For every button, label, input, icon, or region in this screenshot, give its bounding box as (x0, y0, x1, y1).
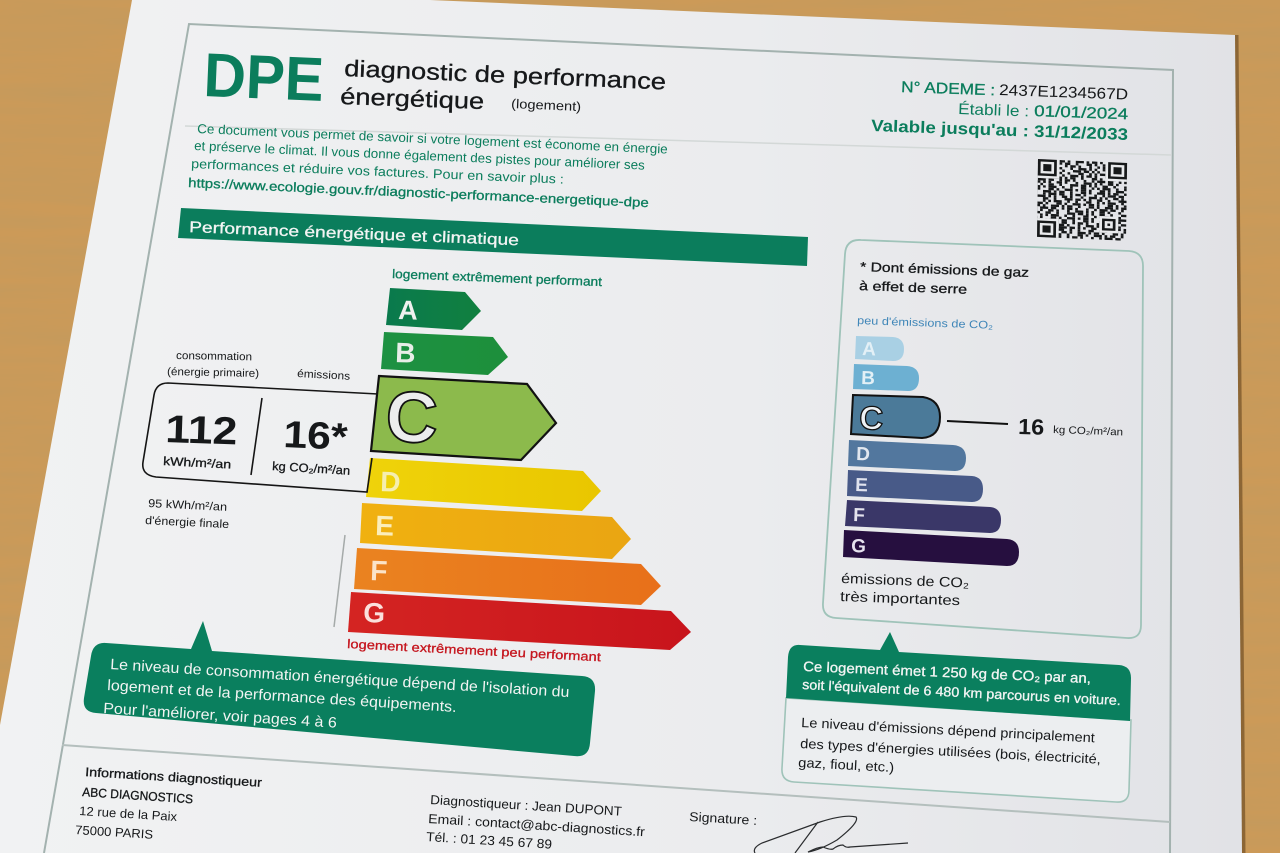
final energy note: 95 kWh/m²/an (148, 498, 227, 514)
bar D (848, 440, 966, 471)
callout: energy consumption: logement et de la performance des équipements. (107, 677, 457, 716)
bar B (853, 364, 919, 391)
unit: kWh: kWh/m²/an (163, 454, 231, 472)
callout: energy consumption (84, 621, 595, 756)
header: DPE logo: DPE (202, 41, 325, 115)
final energy note (145, 498, 229, 531)
footer: diagnostician details: Informations diagnostiqueur (85, 765, 262, 790)
bar C (current class) (851, 395, 940, 438)
icon: QR code (1037, 159, 1128, 241)
intro paragraph: et préserve le climat. Il vous donne également des pistes pour améliorer ses (194, 138, 646, 173)
callout: energy consumption: Le niveau de consommation énergétique dépend de l'isolation du (110, 656, 570, 701)
footer: diagnostician details: 75000 PARIS (75, 823, 154, 842)
bar G: G (851, 536, 866, 558)
value: 112: 112 (165, 408, 238, 454)
arrow G: G (363, 597, 386, 629)
consumption labels (167, 350, 351, 383)
header: title (340, 55, 667, 114)
arrow C (current class) (371, 376, 556, 460)
header: reference block: 2437E1234567D (999, 82, 1128, 103)
arrow E: E (375, 510, 395, 542)
bar A (855, 336, 904, 361)
arrow A: A (398, 295, 418, 326)
consumption labels: (énergie primaire) (167, 366, 259, 380)
value: 16 kg CO2 (1018, 414, 1123, 440)
final energy note: d'énergie finale (145, 515, 229, 531)
arrow F: F (370, 555, 388, 587)
arrow E (360, 503, 631, 559)
header: reference block: Établi le : (958, 101, 1029, 120)
footer: contact details (426, 792, 646, 852)
bar F (845, 500, 1001, 533)
arrow G (348, 592, 691, 650)
header: title: énergétique (340, 83, 485, 114)
callout: CO2 emissions: Ce logement émet 1 250 kg de CO₂ par an, (803, 658, 1091, 686)
header: reference block: Valable jusqu'au : 31/12/2033 (871, 117, 1128, 144)
arrow F (354, 548, 661, 605)
scale label: bottom: émissions de CO₂ (841, 570, 969, 590)
bar F: F (853, 505, 865, 526)
header: reference block: N° ADEME : (901, 79, 995, 99)
scale label: top: peu d'émissions de CO₂ (857, 315, 993, 332)
footer: signature: Signature : (689, 809, 758, 828)
intro paragraph: performances et réduire vos factures. Pour en savoir plus : (191, 156, 564, 187)
arrow B: B (395, 337, 416, 369)
footer: contact details: Email : contact@abc-diagnostics.fr (428, 811, 646, 839)
intro paragraph (188, 121, 668, 210)
arrow C (current class): C (384, 377, 439, 459)
footer: diagnostician details: ABC DIAGNOSTICS (82, 785, 193, 806)
bar A: A (862, 339, 877, 360)
bar C (current class): C (859, 399, 884, 437)
footer: signature (689, 809, 908, 853)
callout: CO2 emissions: Le niveau d'émissions dépend principalement (801, 715, 1095, 745)
CO2 scale bars A to G (843, 336, 1019, 566)
consumption labels: consommation (176, 350, 252, 363)
panel: greenhouse gas emissions: très importantes (840, 588, 960, 608)
footer: contact details: Tél. : 01 23 45 67 89 (426, 829, 552, 852)
callout: CO2 emissions: gaz, fioul, etc.) (798, 755, 894, 775)
arrow A (386, 288, 481, 330)
arrow D: D (380, 466, 401, 498)
header: reference block (871, 79, 1129, 144)
bar E (847, 470, 983, 502)
intro paragraph: Ce document vous permet de savoir si votre logement est économe en énergie (197, 121, 668, 157)
callout: CO2 emissions (782, 632, 1131, 802)
footer: diagnostician details (75, 765, 262, 842)
energy scale arrows A to G (348, 288, 691, 650)
panel heading: * Dont émissions de gaz (860, 259, 1029, 280)
footer: contact details: Diagnostiqueur : Jean DUPONT (430, 792, 622, 819)
header: title: (logement) (511, 96, 581, 114)
bar E: E (855, 475, 868, 496)
arrow D (366, 458, 601, 511)
divider beside lower scale (334, 535, 345, 627)
value leader line (947, 421, 1008, 424)
consumption labels: émissions (297, 368, 351, 383)
section banner: Performance énergétique et climatique: Performance énergétique et climatique (189, 219, 519, 249)
callout: CO2 emissions: des types d'énergies utilisées (bois, électricité, (800, 736, 1101, 767)
section banner: Performance énergétique et climatique (178, 208, 808, 266)
value: 16 kg CO2: kg CO₂/m²/an (1053, 424, 1123, 438)
intro paragraph: https://www.ecologie.gouv.fr/diagnostic-performance-energetique-dpe (188, 175, 649, 210)
arrow B (381, 332, 508, 375)
panel: greenhouse gas emissions: à effet de serre (859, 278, 967, 297)
callout: energy consumption: Pour l'améliorer, voir pages 4 à 6 (103, 700, 337, 732)
value: 16 kg CO2: 16 (1018, 414, 1045, 440)
panel: greenhouse gas emissions (823, 240, 1143, 638)
footer: diagnostician details: 12 rue de la Paix (79, 804, 178, 824)
bar D: D (856, 444, 870, 465)
callout: CO2 emissions: soit l'équivalent de 6 480 km parcourus en voiture. (802, 677, 1121, 708)
consumption box (143, 383, 378, 492)
energy scale label: bottom: logement extrêmement peu performant (347, 637, 602, 664)
energy scale label: top: logement extrêmement performant (392, 267, 603, 289)
unit: kg CO2: kg CO₂/m²/an (272, 459, 351, 478)
header: reference block: 01/01/2024 (1034, 103, 1129, 123)
header: title: diagnostic de performance (344, 55, 667, 94)
bar B: B (861, 368, 875, 389)
bar G (843, 530, 1019, 566)
value: 16: 16* (283, 414, 349, 459)
